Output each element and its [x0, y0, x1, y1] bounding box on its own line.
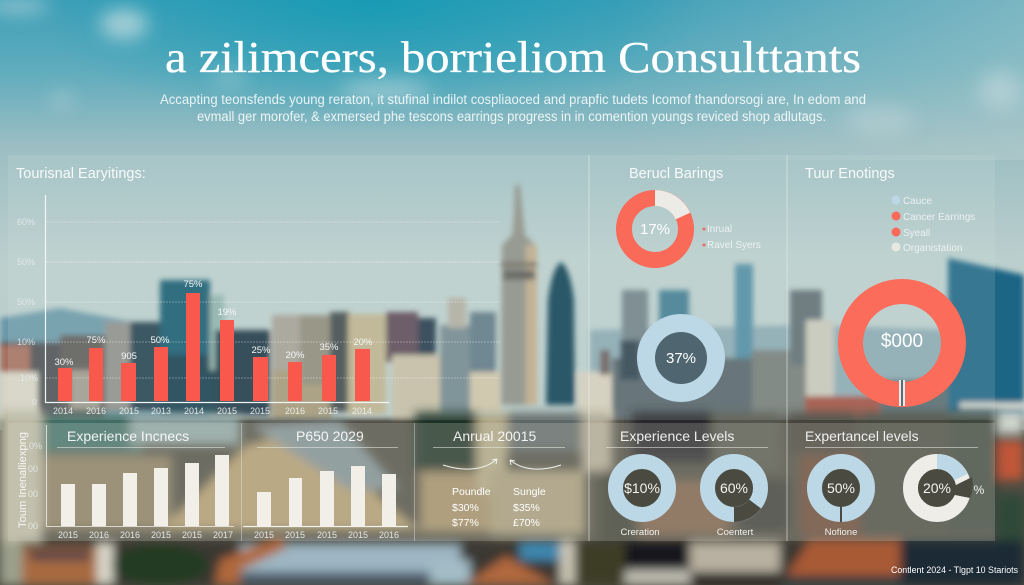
y axis labels: 10% — [17, 337, 35, 347]
year labels: 2015 — [151, 530, 171, 540]
mid and right city — [578, 372, 613, 432]
year labels — [58, 530, 233, 540]
title: a zilimcers, borrieliom Consulttants — [165, 33, 861, 82]
heading: P650 2029 — [296, 428, 364, 444]
donut: 17% — [624, 198, 686, 260]
panel: Anrual 20015 — [433, 428, 565, 529]
rotated y axis title: Toum Inenalliexpng — [17, 432, 29, 528]
footer credit: Contlent 2024 - Tlgpt 10 Stariots — [891, 565, 1018, 576]
donut: 20% — [910, 462, 985, 514]
year labels — [53, 406, 372, 416]
legend — [702, 224, 761, 251]
rooftop band below city — [0, 418, 1024, 585]
y axis labels — [28, 441, 42, 531]
arrow: left curve — [443, 459, 497, 469]
left column values — [452, 486, 491, 529]
panel: bottom translucent band — [8, 423, 995, 541]
year labels: 2017 — [213, 530, 233, 540]
year labels: 2015 — [250, 406, 270, 416]
legend: Cancer Earrings — [903, 212, 975, 223]
bar value labels: 30% — [54, 357, 74, 368]
y axis labels: 00 — [28, 464, 38, 474]
right column values: Sungle — [513, 486, 546, 498]
y axis labels: 50% — [17, 257, 35, 267]
legend: Organistation — [903, 243, 962, 254]
y axis labels — [17, 217, 38, 407]
y axis labels: 50% — [17, 297, 35, 307]
axes — [46, 425, 234, 526]
subtitle text block: evmall ger morofer, & exmersed phe tescons earrings progress in in comention youngs reviced shop adlutags. — [197, 109, 826, 124]
year labels: 2015 — [119, 406, 139, 416]
bar value labels: 75% — [86, 335, 106, 346]
legend: Syeall — [903, 228, 930, 239]
donut: 37%: 37% — [666, 350, 696, 367]
year labels: 2016 — [89, 530, 109, 540]
donut: 60%: 60% — [720, 480, 748, 496]
y axis labels: 0% — [29, 441, 42, 451]
donut value: 17% — [640, 221, 670, 238]
y axis labels: 10% — [20, 373, 38, 383]
year labels: 2015 — [217, 406, 237, 416]
bar value labels: 20% — [353, 337, 373, 348]
bar value labels: 25% — [251, 345, 271, 356]
heading: Tuur Enotings — [805, 166, 895, 182]
donut: 50% — [814, 462, 868, 538]
left column values: Poundle — [452, 486, 491, 498]
donut: 37% — [646, 323, 716, 393]
bar value labels: 50% — [150, 335, 170, 346]
legend: Inrual — [707, 224, 732, 235]
right column values: £70% — [513, 517, 540, 529]
year labels: 2013 — [151, 406, 171, 416]
bar value labels — [54, 279, 373, 368]
panel: Experience Incnecs bars — [28, 425, 234, 540]
bar value labels: 35% — [319, 342, 339, 353]
year labels: 2016 — [285, 406, 305, 416]
year labels: 2014 — [53, 406, 73, 416]
panel: Experience Levels donuts — [606, 428, 768, 538]
cream bars — [61, 455, 229, 526]
donut: $10% — [616, 462, 668, 538]
heading: Expertancel levels — [805, 428, 919, 444]
hazy hills — [0, 308, 210, 420]
year labels: 2015 — [318, 406, 338, 416]
left column values: $77% — [452, 517, 479, 529]
axis — [243, 526, 408, 528]
lower panel scenery — [0, 410, 42, 545]
solid base under lower scenery so blur does not reveal the sky — [0, 430, 1024, 585]
year labels: 2015 — [285, 530, 305, 540]
red bars — [58, 293, 370, 401]
year labels: 2014 — [184, 406, 204, 416]
heading: Tourisnal Earyitings: — [16, 166, 146, 182]
year labels: 2016 — [86, 406, 106, 416]
donut: 20%: % — [974, 483, 985, 497]
year labels: 2015 — [317, 530, 337, 540]
year labels: 2016 — [120, 530, 140, 540]
year labels: 2016 — [379, 530, 399, 540]
subtitle text block: Accapting teonsfends young reraton, it stufinal indilot cospliaoced and prapfic tudets Icomof thandorsogi are, In edom and — [160, 92, 866, 107]
panel: Tourisnal Earyitings bar chart — [16, 166, 500, 416]
donut: $10%: Creration — [620, 527, 660, 538]
left city — [0, 342, 60, 422]
panel: top translucent band — [8, 155, 995, 420]
legend: Ravel Syers — [707, 240, 761, 251]
panel: Tuur Enotings — [805, 166, 975, 406]
axes — [46, 195, 389, 402]
donut: 50%: 50% — [827, 480, 855, 496]
bar value labels: 20% — [285, 350, 305, 361]
panel dividers — [589, 155, 787, 541]
heading: Anrual 20015 — [453, 428, 537, 444]
bottom strip — [0, 542, 1024, 585]
big donut: $000: $000 — [881, 331, 923, 352]
year labels: 2015 — [254, 530, 274, 540]
panel: Beruci Barings donut — [624, 166, 761, 260]
big donut: $000 — [850, 292, 954, 406]
clock tower — [501, 185, 537, 405]
legend: Cauce — [903, 196, 932, 207]
right column values: $35% — [513, 502, 540, 514]
year labels: 2015 — [58, 530, 78, 540]
y axis labels: 60% — [17, 217, 35, 227]
legend — [892, 196, 975, 254]
subtitle text block — [160, 92, 866, 124]
donut: 60%: Coentert — [717, 527, 754, 538]
cream bars — [257, 466, 396, 526]
dark spire — [546, 262, 575, 405]
bar value labels: 19% — [217, 307, 237, 318]
left column values: $30% — [452, 502, 479, 514]
y axis labels: 00 — [28, 489, 38, 499]
y axis labels: 0 — [32, 397, 37, 407]
donut: 60% — [708, 462, 760, 538]
year labels: 2015 — [182, 530, 202, 540]
arrow: right curve — [510, 460, 561, 469]
year labels: 2015 — [348, 530, 368, 540]
right column values — [513, 486, 546, 529]
year labels: 2014 — [352, 406, 372, 416]
y axis labels: 00 — [28, 521, 38, 531]
donut: 20%: 20% — [923, 480, 951, 496]
panel: Expertancel levels donuts — [805, 428, 985, 538]
panel: P650 2029 bars — [242, 423, 414, 541]
donut: $10%: $10% — [624, 480, 660, 496]
donut: 50%: Nofione — [825, 527, 857, 538]
heading: Experience Levels — [620, 428, 734, 444]
bar value labels: 905 — [121, 351, 137, 362]
grid lines — [46, 222, 500, 378]
bar value labels: 75% — [183, 279, 203, 290]
heading: Experience Incnecs — [67, 428, 189, 444]
heading: Berucl Barings — [629, 166, 723, 182]
year labels — [254, 530, 399, 540]
